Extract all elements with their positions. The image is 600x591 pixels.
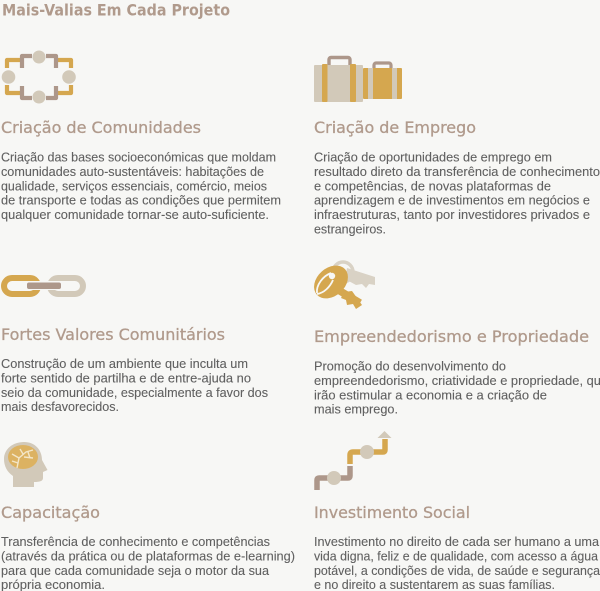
icon: keys xyxy=(308,259,375,309)
heading: Criação de Emprego xyxy=(314,118,476,137)
icon: chain links xyxy=(4,278,83,294)
body text: de transporte e todas as condições que permitem xyxy=(1,193,281,208)
body text: mais emprego. xyxy=(314,402,398,417)
panel: Empreendedorismo e Propriedade xyxy=(308,259,600,417)
panel: Fortes Valores Comunitários xyxy=(1,278,268,414)
body text: para que cada comunidade seja o motor da sua xyxy=(1,563,270,578)
body text: Transferência de conhecimento e competências xyxy=(1,534,270,549)
body text: (através da prática ou de plataformas de e-learning) xyxy=(1,548,295,563)
body text: forte sentido de partilha e de entre-ajuda no xyxy=(1,370,251,386)
body text: comunidades auto-sustentáveis: habitações de xyxy=(1,164,264,179)
body text: irão estimular a economia e a criação de xyxy=(314,387,547,402)
panel: Criação de Emprego xyxy=(314,58,600,236)
body text: Investimento no direito de cada ser humano a uma xyxy=(314,534,600,549)
heading: Investimento Social xyxy=(314,503,470,522)
body text xyxy=(314,150,600,236)
body text xyxy=(1,356,268,414)
panel: Investimento Social xyxy=(314,431,600,591)
icon: head with brain xyxy=(4,442,48,487)
body text: qualquer comunidade tornar-se auto-suficiente. xyxy=(1,207,269,222)
heading: Capacitação xyxy=(1,503,100,522)
body text: estrangeiros. xyxy=(314,222,386,236)
icon: rising path with arrow xyxy=(317,431,392,490)
body text: Promoção do desenvolvimento do xyxy=(314,358,506,374)
heading: Fortes Valores Comunitários xyxy=(1,325,225,344)
body text: e competências, de novas plataformas de xyxy=(314,178,551,193)
body text xyxy=(1,150,281,222)
body text: seio da comunidade, especialmente a favor dos xyxy=(1,385,268,400)
body text: mais desfavorecidos. xyxy=(1,399,119,414)
body text: Criação de oportunidades de emprego em xyxy=(314,150,552,164)
icon: suitcases xyxy=(314,58,402,102)
heading: Criação de Comunidades xyxy=(1,118,201,137)
body text xyxy=(314,358,600,417)
body text: resultado direto da transferência de conhecimento xyxy=(314,164,600,179)
body text: Criação das bases socioeconómicas que moldam xyxy=(1,150,276,164)
body text xyxy=(1,534,295,591)
icon: community ring xyxy=(2,50,76,104)
panel: Criação de Comunidades xyxy=(1,50,281,222)
body text: qualidade, serviços essenciais, comércio, meios xyxy=(1,178,267,193)
title: Mais-Valias Em Cada Projeto xyxy=(2,0,230,20)
heading: Empreendedorismo e Propriedade xyxy=(314,327,589,346)
body text: infraestruturas, tanto por investidores privados e xyxy=(314,207,590,222)
panel: Capacitação xyxy=(1,442,295,591)
body text xyxy=(314,534,600,591)
body text: Construção de um ambiente que inculta um xyxy=(1,356,248,371)
body text: aprendizagem e de investimentos em negócios e xyxy=(314,193,590,208)
